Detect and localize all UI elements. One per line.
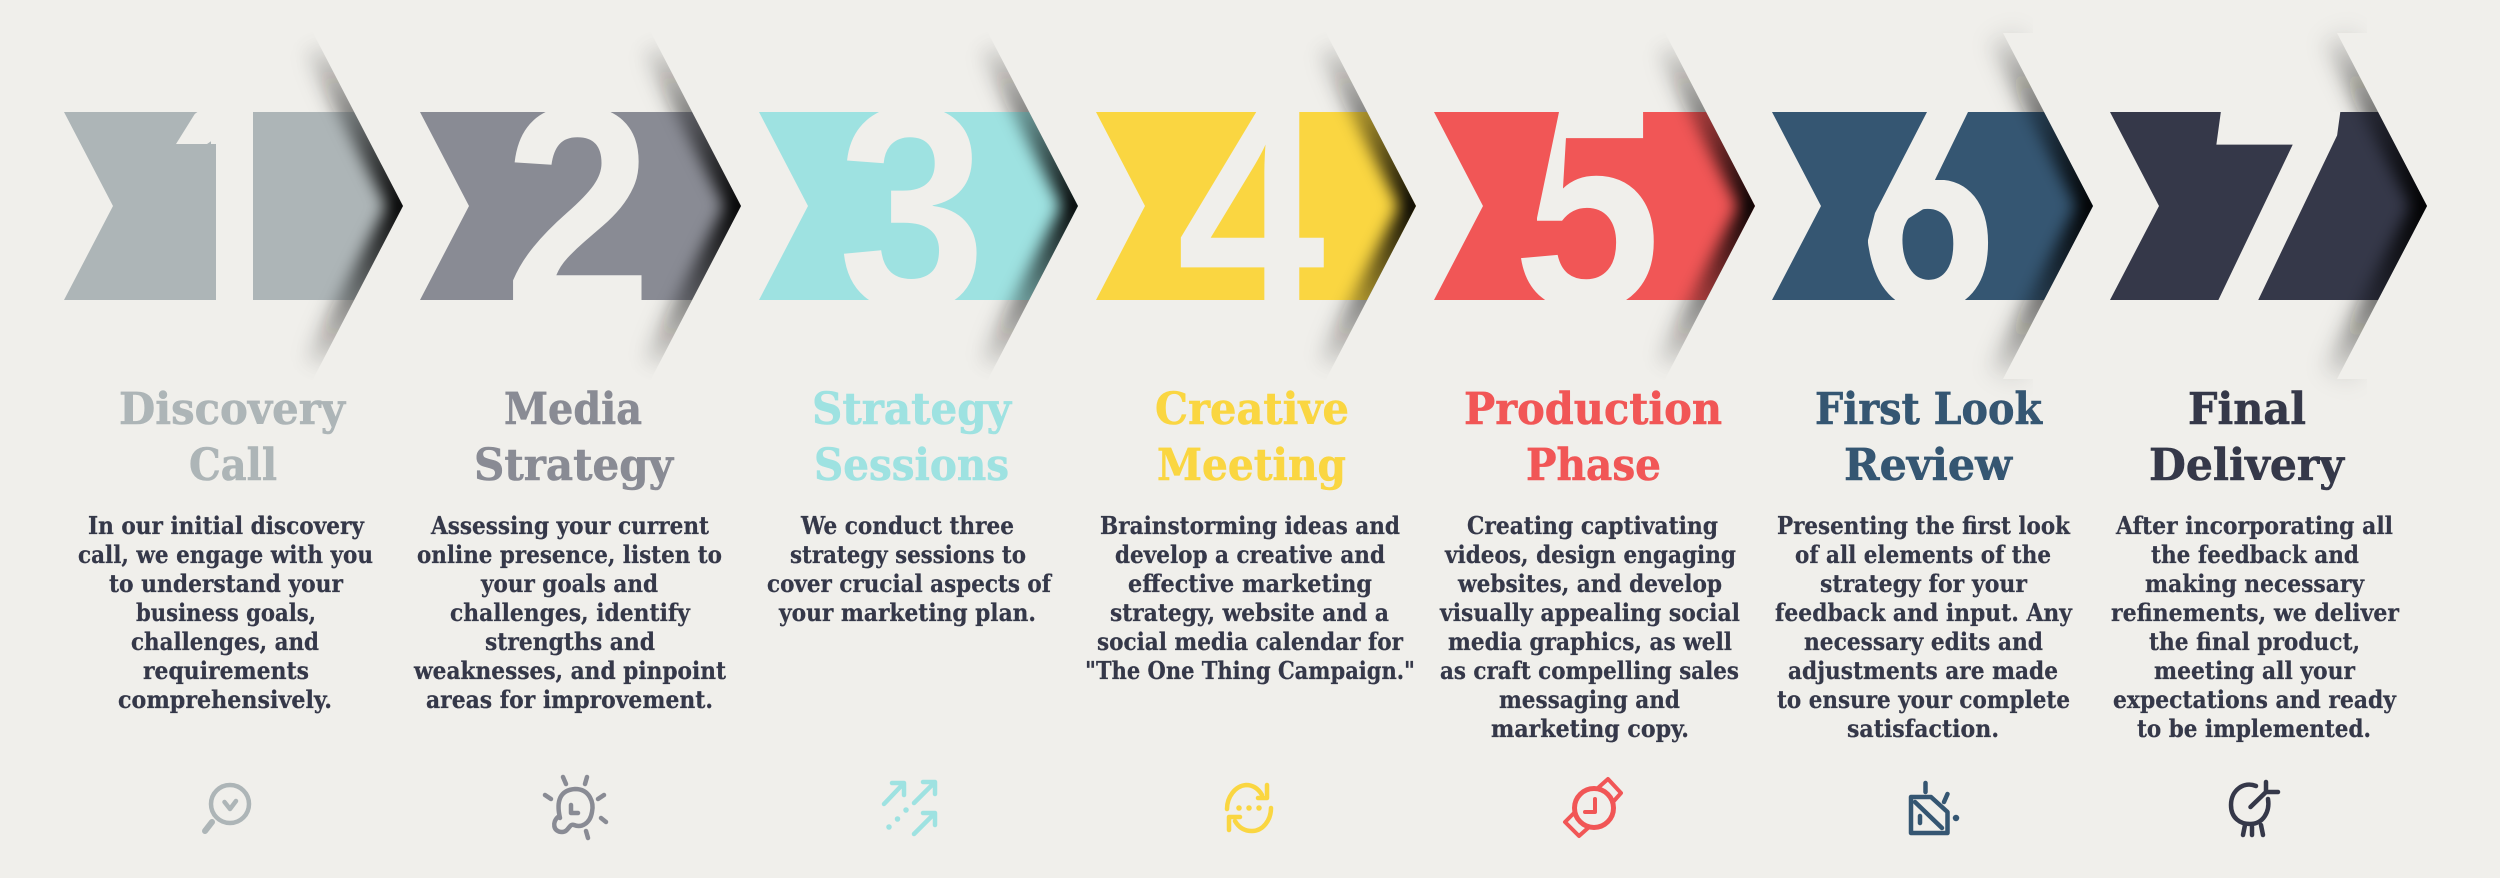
numeral 1: 1: [138, 26, 312, 415]
panel: step 2 arrow: [420, 44, 741, 370]
icon: magnifier with check: [205, 785, 249, 831]
text: step 2 description: challenges, identify: [450, 598, 691, 627]
text: step 5 description: websites, and develop: [1457, 569, 1722, 598]
text: step 4 description: "The One Thing Campaign.": [1085, 656, 1415, 685]
heading: Strategy Sessions: Sessions: [814, 440, 1009, 491]
text: step 1 description: business goals,: [136, 598, 316, 627]
numeral 5: [1521, 112, 1654, 300]
text: step 6 description: of all elements of the: [1795, 540, 2051, 569]
text: step 4 description: strategy, website and a: [1110, 598, 1389, 627]
text: step 3 description: [767, 511, 1052, 627]
numeral 3: 3: [838, 47, 986, 370]
text: step 1 description: comprehensively.: [118, 685, 332, 714]
text: step 1 description: [78, 511, 373, 714]
text: step 6 description: adjustments are made: [1788, 656, 2058, 685]
heading: Creative Meeting: Creative: [1155, 384, 1349, 435]
heading: Media Strategy: Strategy: [474, 440, 674, 491]
icon: idea bulb with clock: [545, 777, 606, 838]
text: step 6 description: necessary edits and: [1804, 627, 2043, 656]
numeral 2: 2: [504, 47, 652, 370]
heading: Final Delivery: [2149, 384, 2345, 491]
text: step 4 description: develop a creative and: [1115, 540, 1385, 569]
text: step 6 description: strategy for your: [1820, 569, 2027, 598]
text: step 3 description: strategy sessions to: [790, 540, 1026, 569]
heading: First Look Review: First Look: [1815, 384, 2043, 435]
panel: step 7 arrow: [2110, 33, 2427, 385]
heading: First Look Review: Review: [1844, 440, 2013, 491]
heading: Discovery Call: Call: [189, 440, 277, 491]
panel: step 5 arrow: [1434, 44, 1755, 370]
panel: step 4 arrow: [1096, 44, 1416, 370]
text: step 5 description: as craft compelling sales: [1440, 656, 1739, 685]
icon: strategy arrows: [884, 782, 935, 834]
text: step 7 description: [2111, 511, 2399, 743]
text: step 7 description: expectations and ready: [2113, 685, 2397, 714]
heading: Production Phase: [1464, 384, 1722, 491]
text: step 1 description: call, we engage with you: [78, 540, 373, 569]
heading: Media Strategy: [474, 384, 674, 491]
text: step 1 description: to understand your: [109, 569, 343, 598]
text: step 2 description: weaknesses, and pinpoint: [413, 656, 726, 685]
text: step 7 description: refinements, we deliver: [2111, 598, 2399, 627]
text: step 6 description: [1775, 511, 2073, 743]
text: step 6 description: Presenting the first look: [1777, 511, 2071, 540]
heading: Creative Meeting: Meeting: [1157, 440, 1346, 491]
text: step 5 description: media graphics, as well: [1448, 627, 1732, 656]
text: step 7 description: making necessary: [2145, 569, 2365, 598]
text: step 1 description: challenges, and: [131, 627, 319, 656]
heading: Strategy Sessions: [812, 384, 1012, 491]
text: step 7 description: the feedback and: [2151, 540, 2359, 569]
heading: Final Delivery: Final: [2188, 384, 2306, 435]
icon: wristwatch: [1565, 779, 1621, 836]
text: step 1 description: In our initial discovery: [88, 511, 365, 540]
text: step 4 description: Brainstorming ideas and: [1100, 511, 1400, 540]
text: step 7 description: After incorporating all: [2115, 511, 2393, 540]
panel: step 6 arrow: [1772, 33, 2093, 379]
numeral 1: [176, 112, 253, 300]
text: step 5 description: marketing copy.: [1491, 714, 1689, 743]
heading: First Look Review: [1815, 384, 2043, 491]
heading: Strategy Sessions: Strategy: [812, 384, 1012, 435]
text: step 4 description: effective marketing: [1128, 569, 1372, 598]
heading: Media Strategy: Media: [504, 384, 642, 435]
text: step 5 description: visually appealing social: [1439, 598, 1740, 627]
numeral 5: 5: [1513, 47, 1661, 370]
text: step 5 description: messaging and: [1499, 685, 1680, 714]
text: step 4 description: social media calendar for: [1097, 627, 1403, 656]
icon: sync arrows: [1227, 785, 1271, 831]
text: step 2 description: strengths and: [485, 627, 655, 656]
panel: step 1 arrow: [64, 44, 403, 368]
text: step 6 description: to ensure your complete: [1777, 685, 2070, 714]
icon: target with dart: [2231, 782, 2278, 835]
text: step 6 description: feedback and input. Any: [1775, 598, 2073, 627]
numeral 6: 6: [1857, 46, 1997, 370]
text: step 4 description: [1085, 511, 1415, 685]
text: step 2 description: Assessing your current: [430, 511, 709, 540]
text: step 7 description: meeting all your: [2154, 656, 2355, 685]
heading: Creative Meeting: [1155, 384, 1349, 491]
text: step 7 description: to be implemented.: [2137, 714, 2371, 743]
heading: Production Phase: Phase: [1526, 440, 1661, 491]
text: step 2 description: areas for improvement.: [426, 685, 713, 714]
text: step 5 description: [1439, 511, 1740, 743]
text: step 2 description: [413, 511, 726, 714]
numeral 4: 4: [1177, 47, 1327, 370]
text: step 1 description: requirements: [143, 656, 309, 685]
numeral 6: [1868, 112, 1988, 300]
heading: Final Delivery: Delivery: [2149, 440, 2345, 491]
text: step 7 description: the final product,: [2149, 627, 2360, 656]
numeral 7: 7: [2169, 47, 2366, 385]
heading: Discovery Call: Discovery: [119, 384, 346, 435]
panel: step 3 arrow: [759, 44, 1078, 370]
icon: note with sparks: [1911, 783, 1956, 833]
text: step 5 description: Creating captivating: [1467, 511, 1718, 540]
text: step 2 description: your goals and: [480, 569, 658, 598]
text: step 3 description: your marketing plan.: [778, 598, 1036, 627]
heading: Production Phase: Production: [1464, 384, 1722, 435]
text: step 5 description: videos, design engaging: [1444, 540, 1736, 569]
text: step 6 description: satisfaction.: [1847, 714, 1999, 743]
text: step 3 description: We conduct three: [800, 511, 1014, 540]
heading: Discovery Call: [119, 384, 346, 491]
text: step 2 description: online presence, listen to: [417, 540, 722, 569]
text: step 3 description: cover crucial aspects of: [767, 569, 1052, 598]
